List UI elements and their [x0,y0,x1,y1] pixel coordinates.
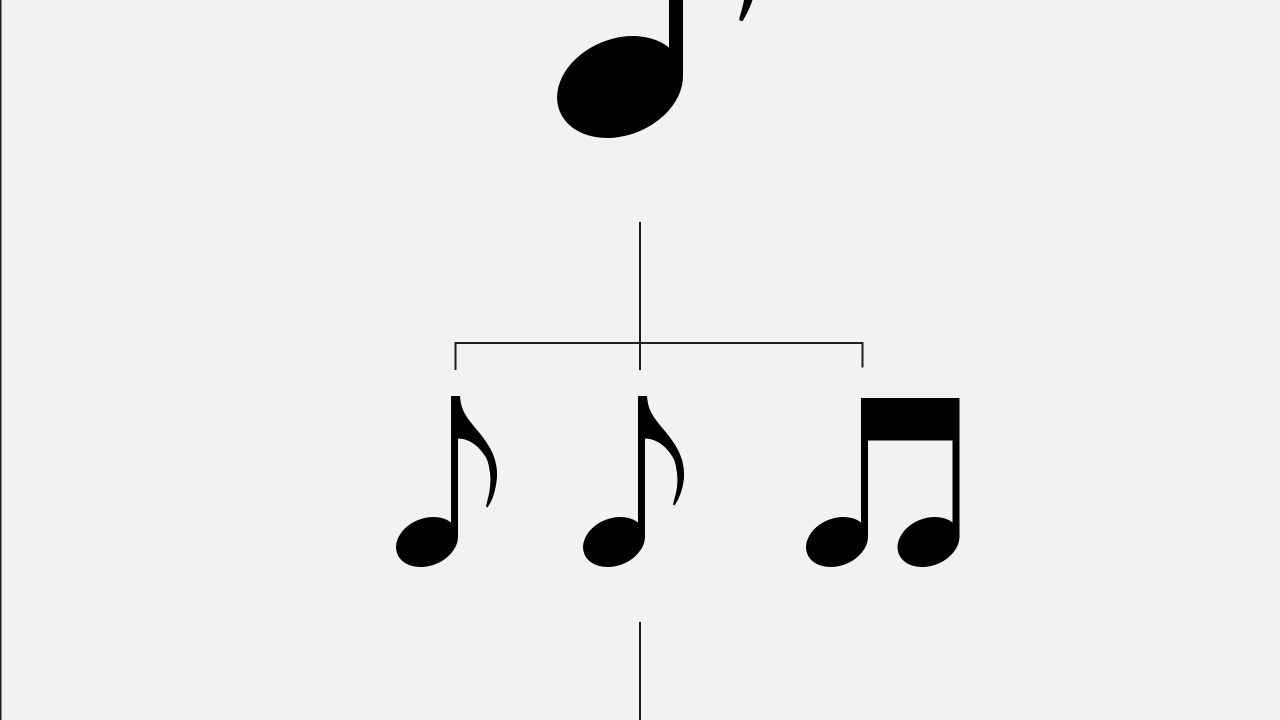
connector: vertical line from large note [639,222,641,370]
icon: large quarter-note cropped at top [542,0,752,156]
connector: bracket to three note groups [456,343,862,370]
icon: beamed pair of sixteenth notes [798,398,967,576]
connector: vertical line to next row [639,622,641,720]
icon: second eighth note [575,396,684,576]
icon: first eighth note [388,396,497,576]
